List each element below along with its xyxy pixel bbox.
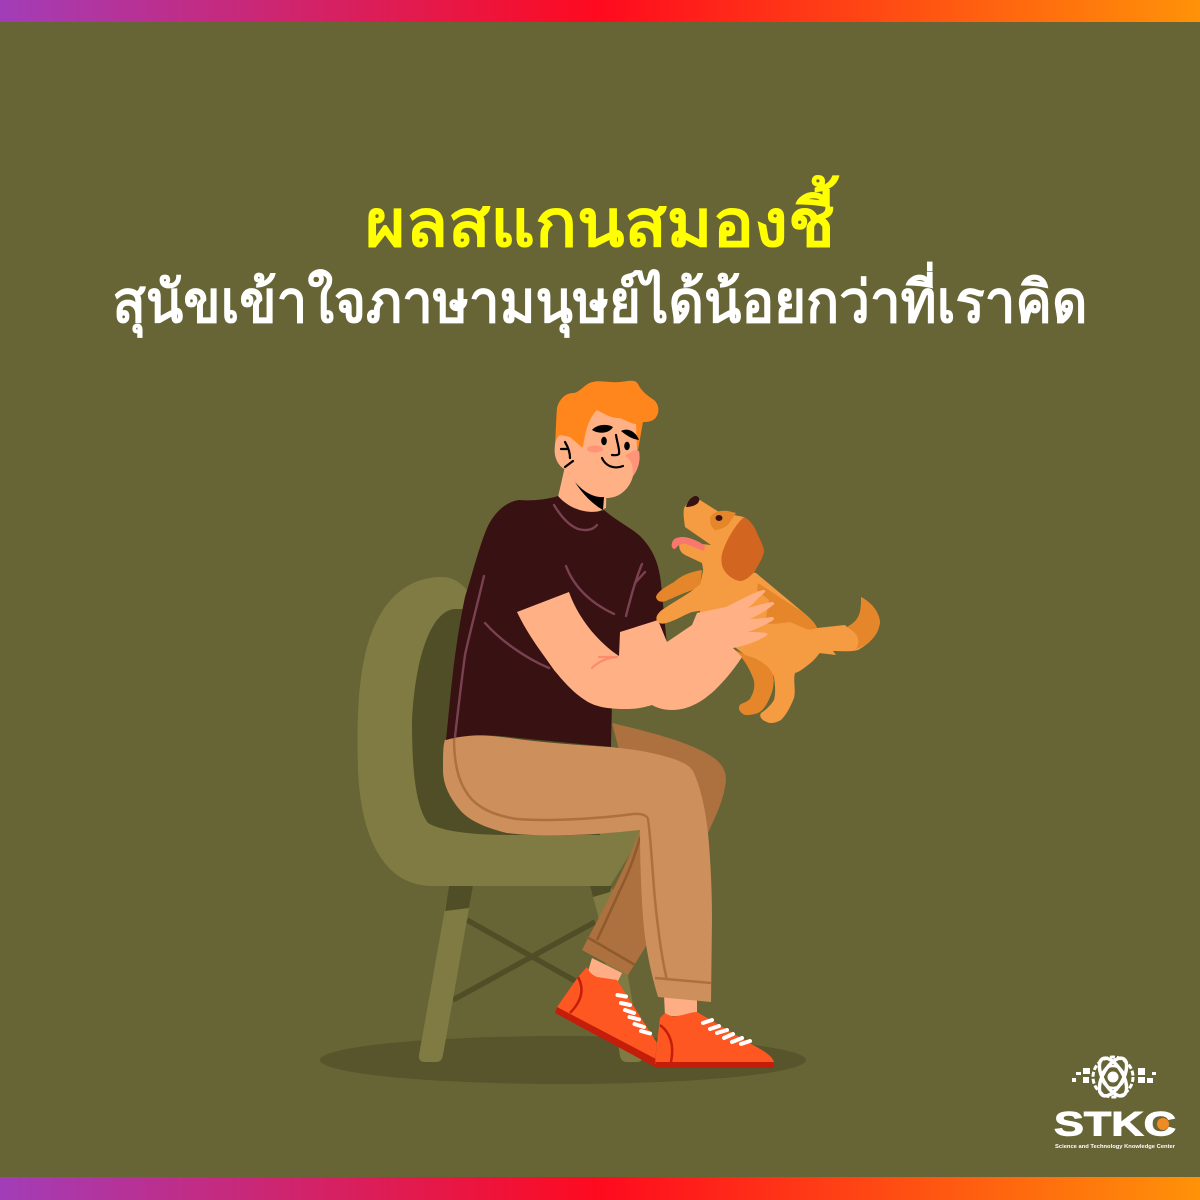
shirt (446, 496, 667, 747)
elbow crease (592, 657, 617, 668)
puppy body (656, 496, 880, 723)
head (679, 497, 760, 580)
tail (817, 597, 880, 655)
logo orange dot (1157, 1118, 1169, 1130)
ear (721, 517, 764, 581)
face (566, 410, 638, 498)
illustration: man holding a puppy on a chair (320, 381, 880, 1084)
nose (686, 496, 699, 507)
top gradient bar (0, 0, 1200, 22)
neck and head (555, 410, 640, 512)
chair inner seat (412, 609, 610, 835)
back patch (757, 583, 817, 630)
chair (358, 577, 645, 1062)
arms and hands (517, 590, 774, 710)
far trouser leg (582, 723, 726, 975)
cheeks (587, 446, 603, 452)
title (112, 174, 1088, 339)
ground shadow (320, 1036, 806, 1084)
far shoe (555, 967, 657, 1068)
chair cross brace (453, 920, 595, 1000)
chair front leg (419, 886, 473, 1062)
ear (555, 435, 585, 470)
jaw shadow (575, 482, 604, 510)
title line 2: สุนัขเข้าใจภาษามนุษย์ได้น้อยกว่าที่เราคิด (112, 261, 1088, 339)
eye patch (710, 511, 736, 530)
logo tagline: Science and Technology Knowledge Center (1055, 1144, 1176, 1150)
torso and hind leg (700, 562, 822, 723)
far ankle (586, 958, 622, 985)
chair shell (358, 577, 645, 886)
near shoe (655, 1012, 774, 1068)
logo wordmark: STKC (1054, 1106, 1176, 1144)
far front leg (656, 570, 702, 602)
near ankle (664, 995, 697, 1016)
tongue (672, 537, 705, 551)
puppy near front leg (656, 570, 738, 624)
STKC logo (1054, 1054, 1176, 1150)
chair back leg (590, 886, 642, 1062)
facial features (592, 425, 639, 440)
shirt fold lines (455, 505, 645, 737)
hair (555, 381, 658, 468)
trouser seams (454, 738, 711, 983)
title line 1: ผลสแกนสมองชี้ (365, 174, 840, 260)
near trouser leg (443, 735, 712, 1002)
bottom gradient bar (0, 1177, 1200, 1200)
logo atom mark (1093, 1054, 1133, 1100)
logo pixel dots (1072, 1068, 1156, 1083)
far hind leg (735, 650, 774, 715)
eye (716, 515, 722, 521)
